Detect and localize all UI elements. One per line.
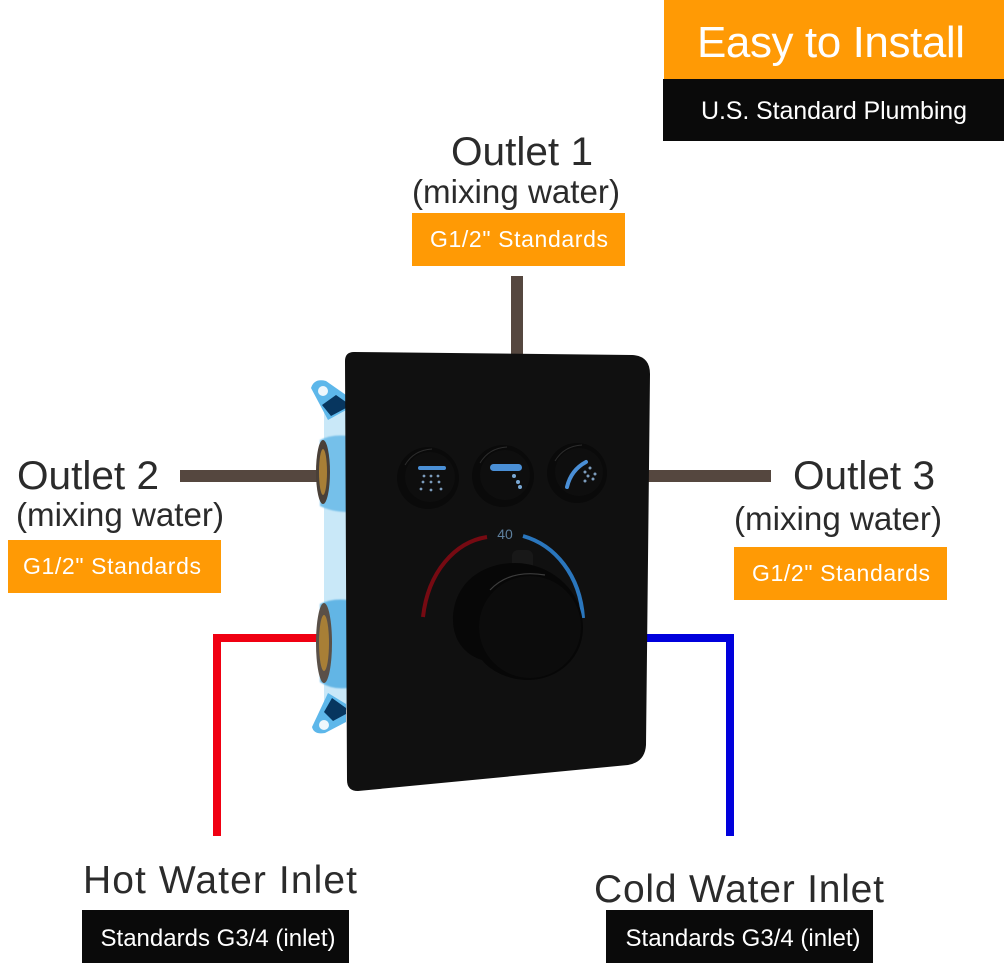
label: outlet 1: Outlet 1 xyxy=(451,130,593,174)
bracket: bottom xyxy=(312,693,346,733)
button: spout xyxy=(472,445,534,507)
thermostat dial xyxy=(453,550,583,680)
control plate xyxy=(345,352,650,791)
pipe: outlet 2 xyxy=(180,470,320,482)
pipe: cold water xyxy=(645,638,730,836)
badge: Easy to Install: U.S. Standard Plumbing xyxy=(701,97,967,125)
button: overhead shower xyxy=(397,447,459,509)
label: cold water inlet: Cold Water Inlet xyxy=(594,868,884,911)
label: outlet 2: G1/2" Standards xyxy=(23,553,201,579)
pipe: outlet 1 xyxy=(511,276,523,356)
label: outlet 3: Outlet 3 xyxy=(793,454,935,498)
pipe: outlet 3 xyxy=(645,470,771,482)
label: outlet 3 xyxy=(734,454,947,600)
label: outlet 3: (mixing water) xyxy=(734,500,942,537)
pipe: hot water xyxy=(217,638,320,836)
bracket: top xyxy=(311,380,346,420)
button: hand shower xyxy=(547,443,607,503)
label: outlet 1: G1/2" Standards xyxy=(430,226,608,252)
brass port: lower xyxy=(316,603,332,683)
label: outlet 3: G1/2" Standards xyxy=(752,560,930,586)
badge: Easy to Install: Easy to Install xyxy=(697,18,965,67)
label: outlet 2: (mixing water) xyxy=(16,496,224,533)
temperature arc: cold xyxy=(523,536,583,618)
label: outlet 2: Outlet 2 xyxy=(17,454,159,498)
mounting box xyxy=(311,380,348,733)
label: outlet 1 xyxy=(412,130,625,266)
label: outlet 2 xyxy=(8,454,224,593)
label: outlet 1: (mixing water) xyxy=(412,173,620,210)
label: cold water inlet: Standards G3/4 (inlet) xyxy=(626,925,860,952)
temperature arc: hot xyxy=(423,537,487,617)
label: cold water inlet xyxy=(594,868,884,963)
label: hot water inlet xyxy=(82,859,357,963)
badge: Easy to Install xyxy=(663,0,1004,141)
label: hot water inlet: Standards G3/4 (inlet) xyxy=(100,925,336,952)
brass port: upper xyxy=(316,440,330,504)
temperature value: 40 xyxy=(497,526,513,542)
label: hot water inlet: Hot Water Inlet xyxy=(83,859,357,902)
